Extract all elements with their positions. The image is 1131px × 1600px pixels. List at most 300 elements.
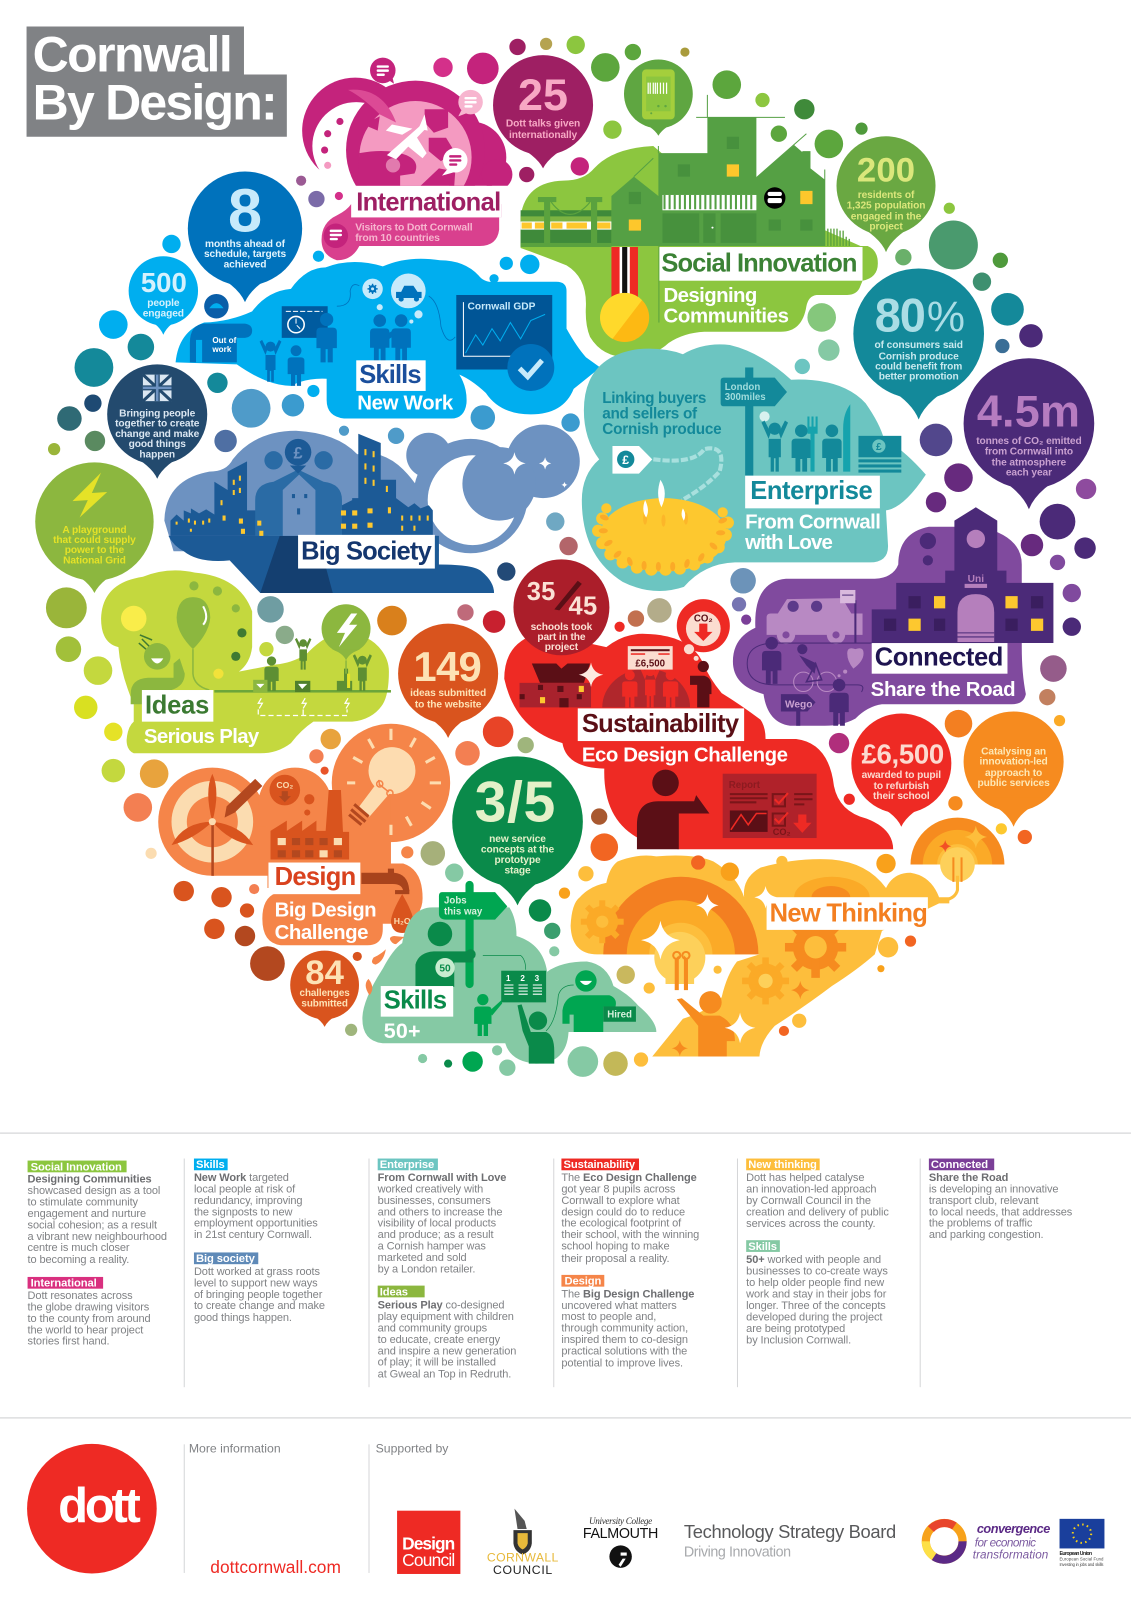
text column 3: enterprise and ideas — [377, 1159, 516, 1380]
heading: International: International — [356, 188, 501, 216]
tag: ideas: Ideas — [380, 1286, 408, 1298]
text: new work: employment opportunities — [194, 1218, 318, 1230]
bubble: 3/5 concepts: 3/5 — [475, 771, 555, 835]
text: designing communities: to becoming a reality. — [28, 1254, 129, 1266]
bubble: 80 percent: % — [927, 294, 965, 342]
text: big design challenge: potential to improve lives. — [561, 1357, 683, 1369]
icon: car — [767, 598, 863, 644]
text: eco design challenge — [561, 1172, 699, 1265]
text: from cornwall with love: From Cornwall with Love — [378, 1172, 506, 1184]
icon: CO2 cloud: CO₂ — [276, 780, 293, 790]
panel: design — [158, 724, 450, 945]
bubble: 84 challenges — [290, 951, 359, 1027]
subheading: New Work: New Work — [357, 392, 454, 414]
bubble: 4.5m tonnes: from Cornwall into — [985, 447, 1073, 458]
tag: social innovation: Social Innovation — [31, 1161, 122, 1173]
heading: Sustainability: Sustainability — [582, 710, 740, 738]
figure: worker 50 — [415, 922, 476, 987]
text column 5: new thinking and skills — [745, 1159, 889, 1346]
figures: students and teacher — [260, 306, 337, 386]
text: international copy: stories first hand. — [28, 1336, 110, 1348]
bubble: 3/5 concepts: prototype — [494, 855, 541, 866]
bubble: 500 people: engaged — [143, 308, 184, 319]
logo: dott — [27, 1444, 157, 1573]
text: eco design challenge: their proposal a reality. — [561, 1253, 670, 1265]
text: eco design challenge: got year 8 pupils across — [561, 1183, 676, 1195]
icon: CO2 cloud — [269, 775, 314, 816]
text: eco design challenge: design could do to reduce — [561, 1206, 685, 1218]
figure: hired person: Hired — [607, 1010, 632, 1021]
bubble: 149 ideas: 149 — [413, 643, 482, 690]
subheading: Designing Communities — [663, 285, 789, 328]
logo: cornwall council — [487, 1509, 559, 1577]
icon: CO2 down bubble: CO₂ — [694, 614, 713, 625]
icons: gears — [581, 900, 846, 1004]
text: skills 50 plus copy: businesses to co-create ways — [746, 1266, 888, 1278]
icon: signpost: 300miles — [725, 392, 766, 403]
figure: hired person — [546, 970, 636, 1032]
text: big design challenge: The Big Design Challenge — [561, 1288, 694, 1300]
text: big society copy: good things happen. — [194, 1312, 292, 1324]
text: visitors: Visitors to Dott Cornwall — [355, 223, 473, 234]
text: new work: redundancy, improving — [194, 1195, 302, 1207]
panel: connected — [733, 507, 1053, 726]
icons: people with cutlery — [759, 404, 850, 472]
icon: jobs signpost: Jobs — [444, 895, 467, 906]
heading: Skills: Skills — [359, 361, 422, 389]
text: skills 50 plus copy: by Inclusion Cornwall. — [746, 1334, 851, 1346]
bubble: 3/5 concepts: concepts at the — [481, 844, 555, 855]
illustration: main rainbow — [603, 877, 870, 954]
text: linking buyers: Linking buyers — [602, 390, 706, 407]
illustration: university building — [872, 507, 1053, 643]
text: share the road: to local needs, that addresses — [929, 1206, 1073, 1218]
panel: ideas — [101, 570, 391, 753]
subheading: 50+: 50+ — [384, 1019, 421, 1043]
text column 4: sustainability and design — [561, 1159, 699, 1369]
bubble: playground: power to the — [65, 545, 125, 556]
footer: more information — [184, 1442, 341, 1577]
text: big society copy: of bringing people together — [194, 1289, 323, 1301]
bubble: 3/5 concepts: stage — [504, 866, 531, 877]
heading: Enterprise: Enterprise — [750, 477, 873, 505]
icon: training board: 3 — [535, 974, 540, 983]
bubble: 80 percent: 80 — [875, 289, 926, 342]
bubble: 35 of 45 schools: 35 — [527, 578, 555, 606]
text: new work: the signposts to new — [194, 1206, 292, 1218]
bubble: 8 months — [188, 171, 302, 302]
text: big design challenge: inspired them to co-design — [561, 1334, 688, 1346]
text: from cornwall with love: marketed and sold — [378, 1252, 467, 1264]
text: eco design challenge: school hoping to make — [561, 1241, 670, 1253]
heading: Design: Design — [275, 863, 356, 891]
figure: person raising hand — [518, 1004, 554, 1064]
figures: handshake — [370, 314, 411, 361]
text: eco design challenge: the ecological footprint of — [561, 1218, 682, 1230]
text: serious play: at Gweal an Top in Redruth. — [378, 1368, 511, 1380]
bubble: 84 challenges: challenges — [300, 988, 350, 999]
text: new work: New Work targeted — [194, 1172, 289, 1184]
text: new thinking copy: services across the county. — [746, 1218, 875, 1230]
bubble: 80 percent — [853, 268, 984, 420]
icon: moon and stars — [428, 447, 568, 545]
text: linking buyers: Cornish produce — [602, 421, 722, 438]
text: big society copy: level to support new ways — [194, 1277, 318, 1289]
text: designing communities: social cohesion; as a result — [28, 1219, 157, 1231]
icon: gear and car — [362, 274, 426, 324]
subheading: Big Design Challenge: Challenge — [275, 922, 368, 944]
bubble: 25 talks: Dott talks given — [506, 119, 580, 130]
icon: signpost: London — [725, 382, 760, 393]
tag: skills: Skills — [748, 1241, 777, 1253]
logo: european union flag: European Union — [1060, 1551, 1092, 1557]
icon: banknotes: £ — [876, 442, 882, 453]
bubble: 4.5m tonnes: each year — [1006, 468, 1052, 479]
bubble: catalysing: public services — [978, 778, 1050, 789]
text: linking buyers: and sellers of — [602, 406, 698, 423]
panel: skills new work — [176, 259, 600, 419]
bubble: 6,500 pounds — [851, 713, 951, 827]
bubble: 4.5m tonnes: the atmosphere — [992, 457, 1067, 468]
bubble: catalysing: Catalysing an — [981, 746, 1046, 757]
icon: wind turbine — [171, 774, 262, 876]
icon: signpost — [721, 367, 787, 476]
text: new work: local people at risk of — [194, 1183, 296, 1195]
icon: price tag and chain: £ — [622, 453, 629, 467]
bubble: playground: National Grid — [63, 555, 126, 566]
chart: report: Report — [729, 780, 761, 791]
logo: european union flag — [1060, 1519, 1104, 1567]
heading: Skills: Skills — [384, 986, 447, 1014]
bubble: 80 percent: Cornish produce — [879, 351, 959, 362]
text: new thinking copy — [746, 1172, 889, 1230]
chart: Cornwall GDP: Cornwall GDP — [468, 301, 536, 312]
text: big society copy: Dott worked at grass roots — [194, 1266, 320, 1278]
subheading: From Cornwall with Love: From Cornwall — [745, 512, 881, 534]
tag: international: International — [31, 1278, 97, 1290]
text: international copy: the globe drawing visitors — [28, 1301, 150, 1313]
tag: new thinking: New thinking — [748, 1159, 817, 1171]
bubble: 6,500 pounds: £6,500 — [862, 739, 944, 770]
subheading: From Cornwall with Love: with Love — [744, 532, 833, 554]
icon: union flag — [143, 375, 171, 401]
bubble: 4.5m tonnes: 4.5m — [977, 386, 1080, 437]
bubble: bringing people together — [107, 364, 207, 479]
subheading: Designing Communities: Designing — [663, 285, 757, 307]
title: Cornwall — [33, 26, 233, 82]
text: from cornwall with love: businesses, consumers — [378, 1195, 491, 1207]
text: serious play: and community groups — [378, 1322, 488, 1334]
text: skills 50 plus copy: are being prototyped — [746, 1323, 845, 1335]
text: big society copy — [194, 1266, 325, 1324]
bubble: 500 people: people — [147, 298, 180, 309]
bubble: 200 residents: engaged in the — [851, 211, 922, 222]
bubble: 35 of 45 schools: part in the — [537, 632, 586, 643]
text: new thinking copy: an innovation-led approach — [746, 1183, 876, 1195]
text: skills 50 plus copy: to help older people find new — [746, 1277, 884, 1289]
divider rules — [0, 1133, 1131, 1419]
tag: big society: Big society — [196, 1253, 256, 1265]
text: new thinking copy: by Cornwall Council in the — [746, 1195, 871, 1207]
text: skills 50 plus copy: work and stay in their jobs for — [745, 1288, 887, 1300]
logo: design council: Council — [402, 1550, 455, 1570]
subheading: Designing Communities: Communities — [663, 306, 789, 328]
figure: worker 50: 50 — [439, 964, 451, 975]
bubble: 4.5m tonnes — [964, 358, 1094, 509]
text: serious play — [378, 1300, 516, 1380]
footer: supported by — [368, 1442, 449, 1573]
bubble: 25 talks: internationally — [509, 130, 578, 141]
text: skills 50 plus copy: longer. Three of the concepts — [746, 1300, 886, 1312]
logo: convergence — [926, 1521, 1050, 1562]
text: international copy: to the county from around — [28, 1313, 151, 1325]
icon: plane — [386, 114, 428, 159]
text: international copy — [28, 1290, 151, 1348]
text: big design challenge: most to people and, — [561, 1311, 656, 1323]
logo: cornwall council: CORNWALL — [487, 1551, 559, 1565]
footer: more information: More information — [189, 1442, 281, 1456]
bubble: 84 challenges: submitted — [301, 998, 348, 1009]
icon: cheque and winners: £6,500 — [635, 659, 665, 670]
illustration: buildings — [611, 95, 849, 246]
text: share the road: transport club, relevant — [929, 1195, 1039, 1207]
bubble: 80 percent: of consumers said — [875, 340, 963, 351]
bubble: 80 percent: could benefit from — [875, 362, 962, 373]
icon: power circuit — [258, 698, 349, 716]
icon: CO2 down bubble — [677, 599, 730, 661]
text: serious play: Serious Play co-designed — [378, 1300, 504, 1312]
chart: report: CO₂ — [773, 827, 791, 837]
logo: university college falmouth: FALMOUTH — [583, 1526, 658, 1542]
bubble: 200 residents: project — [869, 222, 903, 233]
icon: training board — [474, 955, 546, 1036]
text: from cornwall with love: worked creatively with — [377, 1183, 483, 1195]
bubble: catalysing — [964, 711, 1064, 827]
icon: cheque and winners — [602, 646, 690, 707]
logo: european union flag: European Social Fund — [1060, 1557, 1103, 1562]
bubble: catalysing: innovation-led — [980, 757, 1048, 768]
text: big design challenge — [561, 1288, 694, 1369]
text column 2: skills and big society — [194, 1159, 325, 1324]
logo: design council — [397, 1511, 460, 1574]
text: from cornwall with love: and produce; as a result — [378, 1229, 493, 1241]
text: from cornwall with love: and others to increase the — [378, 1206, 502, 1218]
footer: supported by: Supported by — [376, 1442, 449, 1456]
bubble: 200 residents: 200 — [857, 152, 915, 190]
icon: jobs signpost — [439, 881, 507, 988]
text: designing communities — [28, 1174, 167, 1266]
icons: speech bubbles — [370, 58, 483, 176]
icon: bulb and stars — [641, 886, 777, 990]
text: share the road: is developing an innovative — [929, 1183, 1058, 1195]
text: share the road: Share the Road — [929, 1172, 1008, 1184]
text: from cornwall with love: by a London retailer. — [378, 1264, 475, 1276]
text: big society copy: to create change and make — [194, 1300, 325, 1312]
tag: design: Design — [564, 1276, 602, 1288]
illustration: small rainbow and bulb — [911, 818, 1004, 900]
icon: tap and water drop: H₂O — [394, 916, 411, 926]
text: new work — [194, 1172, 318, 1241]
bubble: 149 ideas — [398, 624, 498, 738]
bubble: 149 ideas: to the website — [415, 699, 482, 710]
decorative dots: scattered circles — [46, 36, 1096, 1077]
bubble: 35 of 45 schools: schools took — [531, 622, 593, 633]
bubble: playground: A playground — [62, 525, 126, 536]
figure: person pointing — [672, 991, 755, 1056]
bubble: 149 ideas: ideas submitted — [410, 688, 486, 699]
bubble: 80 percent: better promotion — [879, 372, 959, 383]
bubble: bringing people together: change and make — [115, 429, 200, 440]
bubble: 8 months: months ahead of — [205, 239, 286, 250]
bubble: 3/5 concepts: new service — [489, 834, 546, 845]
bubble: 25 talks: 25 — [518, 69, 568, 120]
text: serious play: and inspire a new generation — [378, 1345, 516, 1357]
icon: jobs signpost: this way — [444, 907, 483, 918]
panel: big society — [164, 425, 580, 593]
panel: skills 50 plus — [362, 881, 656, 1064]
text: skills 50 plus copy: developed during the project — [746, 1311, 882, 1323]
illustration: cityscape: £ — [294, 444, 303, 462]
logo: european union flag: Investing in jobs and skills — [1060, 1562, 1103, 1567]
figure: out of work — [190, 294, 252, 362]
logo: technology strategy board: Technology Strategy Board — [684, 1521, 896, 1542]
heading: Connected: Connected — [875, 644, 1003, 672]
heading: Social Innovation: Social Innovation — [661, 250, 857, 278]
bubble: 84 challenges: 84 — [305, 954, 345, 992]
logo: design council: Design — [402, 1533, 455, 1553]
bubble: 6,500 pounds: awarded to pupil — [862, 770, 941, 781]
text: serious play: to educate, create energy — [378, 1334, 501, 1346]
illustration: road users: Wego — [785, 699, 813, 710]
panel: social innovation — [521, 95, 878, 357]
figure: presenter — [637, 770, 709, 849]
text: from cornwall with love: visibility of local products — [378, 1218, 497, 1230]
text: eco design challenge: their school, with the winning — [561, 1229, 699, 1241]
icon: bus stop — [840, 590, 856, 643]
bubble: phone — [624, 60, 693, 136]
text: new thinking copy: Dott has helped catalyse — [746, 1172, 864, 1184]
icon: price tag and chain — [612, 446, 721, 500]
bubble: 35 of 45 schools — [513, 559, 609, 655]
subheading: Serious Play: Serious Play — [144, 726, 260, 748]
panel: new thinking — [571, 818, 1004, 1056]
text: skills 50 plus copy — [745, 1254, 888, 1346]
bubble: 200 residents — [837, 136, 936, 252]
bubble: 4.5m tonnes: tonnes of CO₂ emitted — [976, 436, 1082, 447]
panel: sustainability — [504, 559, 893, 849]
bubble: 6,500 pounds: their school — [873, 791, 930, 802]
icon: power balloon — [322, 604, 371, 674]
text: big design challenge: through community action, — [561, 1323, 688, 1335]
icon: balloon — [177, 597, 210, 690]
bubble: playground — [35, 462, 154, 593]
icon: light bulb — [347, 729, 441, 835]
figure: dark person — [690, 661, 711, 707]
logo: convergence: for economic — [975, 1536, 1036, 1549]
text: designing communities: centre is much closer — [28, 1242, 130, 1254]
bubble: 500 people — [129, 256, 198, 335]
chart: report — [723, 774, 817, 838]
text: big design challenge: uncovered what matters — [561, 1300, 677, 1312]
text: new work: in 21st century Cornwall. — [194, 1229, 312, 1241]
subheading: From Cornwall with Love — [744, 512, 881, 554]
panel: enterprise — [582, 344, 926, 591]
icon: factory — [271, 790, 349, 859]
text: designing communities: to stimulate community — [28, 1196, 139, 1208]
icon: training board: 1 — [506, 974, 511, 983]
icon: medal — [600, 247, 649, 342]
illustration: university building: Uni — [968, 574, 984, 585]
illustration: cityscape — [168, 434, 494, 593]
text: big design challenge: practical solutions with the — [561, 1346, 687, 1358]
illustration: road users — [747, 637, 873, 726]
text: serious play: of play; it will be installed — [378, 1357, 496, 1369]
tag: connected: Connected — [931, 1159, 988, 1171]
logo: convergence: convergence — [977, 1521, 1050, 1536]
figure: thumbs up child — [131, 635, 185, 704]
illustration: train — [521, 197, 611, 247]
text: designing communities: a vibrant new neighbourhood — [28, 1231, 167, 1243]
heading: New Thinking: New Thinking — [770, 900, 928, 928]
text: eco design challenge: Cornwall to explore what — [561, 1195, 680, 1207]
text: from cornwall with love: a Cornish hamper was — [378, 1241, 486, 1253]
footer: more information: dottcornwall.com — [210, 1557, 341, 1577]
logo: university college falmouth: University College — [589, 1516, 652, 1526]
tag: enterprise: Enterprise — [380, 1159, 434, 1171]
figure: out of work: Out of — [212, 336, 237, 345]
text: international copy: Dott resonates across — [28, 1290, 133, 1302]
icon: tap and water drop — [361, 869, 413, 933]
text column 6: connected — [929, 1159, 1073, 1241]
text: from cornwall with love — [377, 1172, 506, 1276]
text: serious play: play equipment with children — [378, 1311, 514, 1323]
text: designing communities: engagement and nurture — [28, 1208, 146, 1220]
logo: convergence: transformation — [973, 1549, 1048, 1562]
bubble: 8 months: achieved — [224, 259, 266, 270]
logo: cornwall council: COUNCIL — [493, 1563, 552, 1577]
bubble: 8 months: schedule, targets — [204, 249, 286, 260]
heading: Ideas: Ideas — [145, 691, 209, 719]
figure: out of work: work — [211, 345, 232, 354]
bubble: catalysing: approach to — [985, 768, 1042, 779]
subheading: Eco Design Challenge: Eco Design Challenge — [582, 744, 788, 766]
bubble: 200 residents: residents of — [858, 190, 915, 201]
subheading: Big Design Challenge — [275, 900, 377, 944]
pink banner — [322, 204, 501, 260]
text: visitors — [355, 223, 473, 244]
tag: skills: Skills — [196, 1159, 225, 1171]
text: share the road: and parking congestion. — [929, 1229, 1044, 1241]
bubble: 500 people: 500 — [141, 267, 187, 298]
text: new thinking copy: creation and delivery of public — [746, 1206, 889, 1218]
text: international copy: the world to hear project — [28, 1324, 143, 1336]
text: designing communities: Designing Communities — [28, 1174, 152, 1186]
title: By Design: — [33, 74, 278, 130]
bubble: bringing people together: good things — [129, 439, 186, 450]
bubble: playground: that could supply — [53, 535, 136, 546]
subheading: Share the Road: Share the Road — [871, 679, 1016, 701]
text: linking buyers — [602, 390, 722, 438]
icon: training board: 2 — [520, 974, 525, 983]
bubble: 35 of 45 schools: 45 — [569, 592, 597, 620]
heading: Big Society: Big Society — [301, 537, 433, 565]
bubble: bringing people together: happen — [139, 449, 175, 460]
bubble: 25 talks — [493, 55, 593, 168]
bubble: 35 of 45 schools: project — [545, 642, 579, 653]
text: skills 50 plus copy: 50+ worked with people and — [746, 1254, 881, 1266]
line: ground — [214, 690, 391, 693]
text: share the road — [929, 1172, 1073, 1241]
